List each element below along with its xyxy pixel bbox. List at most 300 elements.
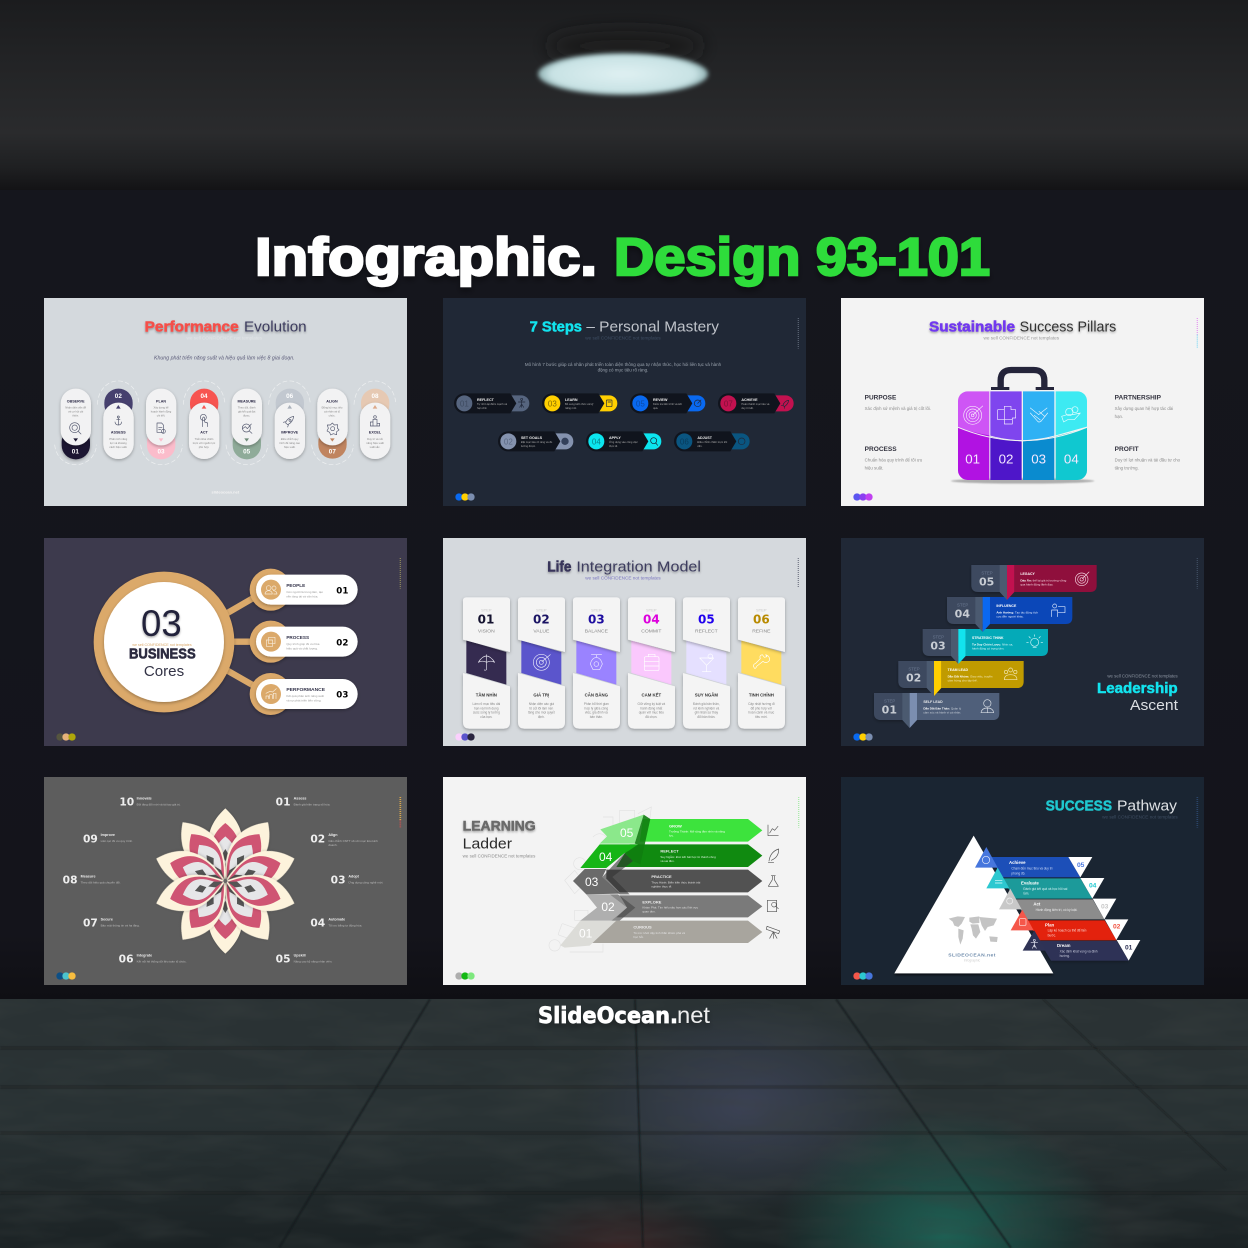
- step 08 excel: 08: [371, 393, 379, 400]
- panel: Sustainable Success Pillars: we sell CONFIDENCE not templates: [984, 336, 1060, 341]
- item 07 secure: [83, 917, 140, 930]
- step 02 set goals: SET GOALS: [521, 436, 543, 440]
- card 06 refine: hoàn cảnh và mục: [748, 711, 775, 715]
- panel: flower ten steps: [44, 777, 407, 985]
- text block: subtitle: Khung phát triển năng suất và hiệu quả làm việc 8 giai đoạn.: [154, 354, 295, 361]
- item 05 upskill: [276, 953, 332, 966]
- card 02 value: định.: [538, 715, 545, 719]
- arrow 03 practice: nghiệm thực tế.: [651, 884, 672, 888]
- arrow 03 practice: PRACTICE: [651, 874, 672, 879]
- heading: Leadership Ascent: Ascent: [1130, 698, 1178, 714]
- step 07 align: [317, 389, 348, 459]
- heading: 7 Steps: – Personal Mastery: [586, 319, 720, 335]
- arrow 05 grow: Trưởng Thành: Mở rộng tầm nhìn và năng: [669, 830, 725, 834]
- step 03 learn: LEARN: [565, 398, 578, 402]
- text block: process: hiệu suất.: [865, 466, 883, 471]
- step 06 improve: [275, 389, 305, 459]
- step 05 measure: Theo dõi, đánh: [238, 406, 256, 410]
- central circle: 03: [141, 603, 182, 644]
- step 02 assess: cách hiệu suất.: [109, 445, 128, 449]
- step 01 observe: Nhận diện vấn đề: [65, 406, 87, 410]
- step 06 adjust: [674, 431, 750, 451]
- arrow 05 grow: GROW: [669, 823, 682, 828]
- card 05 reflect: STEP: [701, 608, 712, 613]
- step 06 improve: Điều chỉnh quy: [281, 437, 299, 441]
- card 04 commit: STEP: [646, 608, 657, 613]
- band 03 act: [999, 889, 1116, 919]
- step 01 observe: thiện.: [72, 414, 79, 418]
- central circle: BUSINESS: [129, 647, 196, 663]
- item 09 improve: Liên tục tối ưu quy trình.: [101, 839, 133, 843]
- side brand: [796, 318, 800, 349]
- footer brand: SlideOcean.net: net: [677, 1002, 711, 1028]
- icon: world map: [949, 916, 998, 945]
- text block: profit: Duy trì lợi nhuận và tái đầu tư cho: [1115, 458, 1181, 463]
- step 02 assess: Phân tích năng: [109, 437, 128, 441]
- step 08 excel: nâng hiệu suất: [366, 441, 384, 445]
- step 03 plan: chi tiết.: [157, 414, 165, 418]
- card 03 balance: 03: [588, 613, 605, 627]
- item 01 assess: Assess: [294, 796, 306, 800]
- item 03 adopt: [331, 874, 383, 887]
- step 02 team lead: cảm hứng cho tập thể.: [948, 678, 978, 682]
- heading: we sell CONFIDENCE not templates: [463, 854, 535, 859]
- item 06 integrate: [119, 953, 187, 966]
- step 03 strategic think: [923, 629, 1048, 664]
- step 01 self lead: 01: [882, 704, 897, 717]
- step 01 reflect: hạn chế.: [477, 406, 487, 410]
- band 03 act: Hành động kiên trì, có kỷ luật.: [1036, 908, 1078, 912]
- icon: coin hand: [1062, 407, 1080, 422]
- chart: briefcase pillars: 02: [999, 452, 1013, 467]
- step 03 plan: 03: [157, 449, 165, 456]
- heading: 7 Steps: 7 Steps: [530, 319, 582, 335]
- text block: partnership: [1115, 395, 1173, 419]
- panel: Success Pathway: [841, 777, 1204, 985]
- chevron ladder: [560, 815, 650, 948]
- item 08 measure: [63, 874, 121, 887]
- arrow 05 grow: lực.: [669, 834, 674, 838]
- card 03 balance: hợp lý giữa công: [584, 706, 608, 710]
- item 01 assess: [276, 796, 331, 809]
- panel: Life Integration Model: [443, 538, 806, 746]
- title: Design 93-101: [614, 228, 990, 287]
- step 08 excel: Duy trì và nổi: [367, 437, 383, 441]
- heading: Leadership Ascent: we sell CONFIDENCE not templates: [1107, 674, 1178, 679]
- step 01 reflect: REFLECT: [477, 398, 495, 402]
- step 01 reflect: [454, 393, 529, 413]
- step 03 learn: 03: [548, 399, 557, 408]
- item 02 align: doanh.: [328, 843, 338, 847]
- step 03 strategic think: STRATEGIC THINK: [972, 636, 1004, 640]
- step 08 excel: xuất sắc.: [370, 444, 381, 449]
- chart: briefcase pillars: [951, 370, 1094, 484]
- panel: 7 Steps Personal Mastery: [443, 298, 806, 506]
- central circle: [94, 572, 234, 712]
- card 05 reflect: 05: [698, 613, 715, 627]
- item 03 performance: Kết quả phản ánh năng suất: [286, 694, 324, 698]
- item 03 adopt: Adopt: [348, 875, 360, 879]
- step 01 observe: OBSERVE: [67, 399, 85, 403]
- text block: process: [865, 447, 923, 471]
- arrow 01 curious: học hỏi.: [633, 935, 644, 939]
- step 07 achieve: 07: [724, 399, 733, 408]
- step 02 team lead: 02: [906, 672, 921, 685]
- side brand: [796, 558, 800, 588]
- card 01 vision: TẦM NHÌN: [476, 692, 497, 697]
- chevron ladder: 02: [601, 900, 615, 914]
- card 02 value: STEP: [536, 608, 547, 613]
- icon: puzzle: [998, 406, 1016, 424]
- text block: description: Mô hình 7 bước giúp cá nhân phát triển toàn diện thông qua tự nhận thức, học hỏi liên tục và hành: [525, 361, 722, 367]
- item 10 innovate: Innovate: [137, 796, 152, 800]
- chevron ladder: 04: [599, 850, 613, 864]
- item 03 adopt: 03: [331, 874, 346, 887]
- chevron ladder: 01: [579, 927, 593, 941]
- panel: Performance Evolution: we sell CONFIDENCE not templates: [187, 336, 263, 341]
- step 01 self lead: Dẫn Dắt Bản Thân: Quản lý: [923, 706, 961, 710]
- large white triangle: SLIDEOCEAN.net: [948, 952, 996, 958]
- item 02 align: Align: [328, 833, 337, 837]
- arrow 01 curious: CURIOUS: [633, 925, 652, 930]
- card 04 commit: Giữ vững kỷ luật và: [638, 702, 665, 706]
- chart: flower: [151, 808, 300, 954]
- item 04 automate: 04: [310, 917, 325, 930]
- large white triangle: [894, 836, 1053, 973]
- step 05 review: [630, 393, 705, 413]
- step 05 measure: được.: [243, 414, 250, 418]
- step 08 excel: [360, 389, 390, 459]
- heading: Integration Model: [576, 559, 701, 575]
- card 05 reflect: rút kinh nghiệm và: [693, 706, 719, 710]
- side brand: [398, 558, 402, 589]
- arrow 04 reflect: REFLECT: [660, 849, 679, 854]
- step 05 legacy: qua hành động lãnh đạo.: [1020, 582, 1054, 586]
- step 01 reflect: Tự nhìn lại điểm mạnh và: [477, 402, 508, 406]
- item 04 automate: [310, 917, 362, 930]
- item 01 assess: 01: [276, 796, 291, 809]
- step 04 act: Triển khai chiến: [195, 437, 214, 441]
- side brand: [1195, 318, 1199, 349]
- chart: briefcase pillars: 01: [965, 452, 980, 467]
- item 07 secure: Secure: [101, 918, 113, 922]
- card 02 value: tảng cho mọi quyết: [528, 711, 555, 715]
- step 04 influence: 04: [955, 608, 970, 621]
- heading: Pathway: [1117, 798, 1178, 814]
- panel: Learning Ladder: [443, 777, 806, 985]
- text block: profit: [1115, 447, 1181, 471]
- step 04 act: ACT: [200, 431, 209, 435]
- heading: [929, 319, 1116, 335]
- band 02 plan: [1011, 910, 1128, 940]
- item 07 secure: Bảo mật thông tin và hạ tầng.: [101, 924, 140, 928]
- panel: Performance Evolution: [44, 298, 407, 506]
- item 10 innovate: Đổi tăng đổi mới và tái tạo giá trị.: [137, 802, 181, 806]
- icon: target: [964, 406, 983, 424]
- item 01 people: 01: [336, 586, 348, 596]
- step 05 legacy: STEP: [981, 570, 993, 575]
- card 06 refine: để phù hợp với: [751, 706, 772, 710]
- card 06 refine: Cập nhật hướng đi: [748, 702, 775, 706]
- step 07 achieve: ACHIEVE: [741, 398, 758, 402]
- heading: Life: [547, 559, 571, 575]
- card 04 commit: CAM KẾT: [641, 692, 662, 697]
- text block: process: Chuẩn hóa quy trình để tối ưu: [865, 458, 923, 463]
- step 05 review: 05: [636, 399, 645, 408]
- step 04 apply: APPLY: [609, 436, 621, 440]
- heading: Performance Evolution: Performance: [145, 319, 239, 335]
- step 03 strategic think: STEP: [933, 634, 944, 639]
- brand dots: [455, 972, 475, 980]
- band 02 plan: Lập kế hoạch cụ thể để tiến: [1048, 929, 1087, 933]
- card 04 commit: [628, 597, 675, 729]
- step 07 achieve: duy trì kết.: [741, 406, 754, 410]
- item 02 align: 02: [310, 832, 325, 845]
- band 02 plan: 02: [1113, 924, 1121, 931]
- background: floor tiles: [0, 998, 1248, 1248]
- item 03 performance: và sự phát triển bền vững.: [286, 699, 322, 703]
- step 04 influence: [947, 597, 1072, 632]
- card 03 balance: bản thân.: [590, 715, 603, 719]
- side brand: [1195, 558, 1199, 589]
- text block: profit: PROFIT: [1115, 447, 1139, 453]
- band 04 evaluate: 04: [1089, 883, 1097, 890]
- step 04 influence: STEP: [957, 602, 968, 607]
- card 05 reflect: ghi nhận sự thay: [695, 711, 719, 715]
- arrow 01 curious: [590, 921, 780, 943]
- band 01 dream: [1023, 930, 1140, 961]
- icon: ceiling lamp: [538, 53, 708, 95]
- footer brand: slideocean.net: [211, 490, 240, 495]
- heading: SUCCESS: [1046, 798, 1112, 814]
- step 05 measure: MEASURE: [238, 399, 256, 403]
- step 02 assess: ASSESS: [111, 431, 126, 435]
- side brand: [398, 797, 403, 828]
- heading: Leadership Ascent: [1097, 674, 1178, 714]
- item 02 align: Căn chỉnh CNTT số với mục tiêu kinh: [328, 839, 378, 843]
- step 06 improve: trình để nâng cao: [279, 441, 301, 445]
- heading: 7 Steps: [530, 319, 720, 335]
- large white triangle: Infographic: [964, 958, 981, 962]
- card 02 value: VALUE: [533, 629, 550, 635]
- band 05 achieve: phong độ.: [1011, 871, 1025, 875]
- band 05 achieve: [975, 847, 1092, 877]
- chart: briefcase pillars: 04: [1064, 452, 1079, 467]
- card 04 commit: đã chọn.: [645, 715, 658, 719]
- card 06 refine: tiêu mới.: [755, 715, 768, 719]
- panel: 03 Business Cores: [44, 538, 407, 746]
- item 06 integrate: Kết nối hệ thống dữ liệu toàn tổ chức.: [137, 960, 187, 964]
- step 06 improve: hiệu suất.: [284, 445, 296, 449]
- band 02 plan: Plan: [1045, 922, 1054, 927]
- card 06 refine: 06: [753, 613, 770, 627]
- step 08 excel: EXCEL: [369, 431, 382, 435]
- arrow 03 practice: Thực Hành: Biến kiến thức thành trải: [651, 880, 701, 884]
- step 07 align: ALIGN: [326, 399, 338, 403]
- card 01 vision: hạn và hình dung: [474, 706, 499, 710]
- chart: briefcase pillars: 03: [1031, 452, 1046, 467]
- step 02 team lead: STEP: [908, 666, 920, 671]
- side brand: [797, 797, 801, 828]
- text block: purpose: PURPOSE: [865, 395, 896, 401]
- card 05 reflect: SUY NGẪM: [695, 692, 718, 697]
- step 01 self lead: cảm xúc và hành vi cá nhân.: [923, 710, 961, 714]
- band 04 evaluate: Đánh giá kết quả và học hỏi sai: [1023, 887, 1068, 891]
- band 03 act: 03: [1101, 903, 1109, 910]
- step 04 influence: cực đến người khác.: [996, 614, 1024, 618]
- step 04 act: [189, 389, 219, 459]
- brand dots: [455, 733, 475, 741]
- arrow 04 reflect: Suy Ngẫm: Đúc kết bài học từ thành công: [660, 854, 716, 859]
- side brand: [1195, 797, 1200, 828]
- heading: Performance Evolution: [145, 319, 307, 335]
- step 07 achieve: [718, 393, 794, 413]
- step 01 reflect: 01: [460, 399, 469, 408]
- card 03 balance: việc, gia đình và: [585, 711, 608, 715]
- step 04 apply: [586, 431, 661, 451]
- step 07 align: cá nhân và tổ: [324, 410, 340, 414]
- arrow 02 explore: [616, 895, 778, 917]
- heading: Success Pillars: [1020, 319, 1116, 335]
- step 02 assess: 02: [115, 393, 122, 400]
- background: ceiling wall: [0, 0, 1248, 190]
- item 03 adopt: Ứng dụng công nghệ mới.: [348, 880, 383, 885]
- step 06 improve: 06: [286, 393, 294, 400]
- item 01 people: [250, 569, 358, 611]
- item 08 measure: 08: [63, 874, 78, 887]
- connectors: [226, 595, 259, 689]
- step 05 legacy: LEGACY: [1020, 572, 1036, 576]
- panel: 7 Steps Personal Mastery: we sell CONFIDENCE not templates: [585, 336, 661, 341]
- card 06 refine: [738, 597, 785, 729]
- arrow 02 explore: EXPLORE: [642, 899, 662, 904]
- step 01 observe: và cơ hội cải: [68, 410, 84, 414]
- text block: partnership: PARTNERSHIP: [1115, 395, 1161, 401]
- step 04 act: lược với nguồn lực: [193, 441, 216, 445]
- step 02 team lead: Dẫn Dắt Nhóm: Giao việc, truyền: [948, 674, 992, 678]
- card 05 reflect: [683, 597, 730, 729]
- card 06 refine: STEP: [756, 608, 767, 613]
- card 04 commit: quán với mục tiêu: [639, 711, 664, 715]
- brand dots: [455, 493, 475, 501]
- panel: Leadership Ascent: [841, 538, 1204, 746]
- step 03 learn: Bổ sung kiến thức và kỹ: [565, 402, 594, 406]
- chevron ladder: 03: [585, 875, 599, 889]
- brand dots: [853, 733, 873, 741]
- background: dark middle band: [0, 190, 1248, 999]
- text block: partnership: hạn.: [1115, 414, 1123, 419]
- item 01 people: Con người là trung tâm, tạo: [286, 590, 323, 594]
- brand dots: [853, 972, 873, 980]
- step 05 legacy: 05: [979, 576, 994, 589]
- card 06 refine: TINH CHỈNH: [749, 692, 774, 697]
- card 01 vision: Làm rõ mục tiêu dài: [472, 702, 500, 706]
- step 01 self lead: SELF LEAD: [923, 700, 943, 704]
- title: Infographic.: [255, 228, 597, 287]
- card 02 value: 02: [533, 613, 550, 627]
- step 05 legacy: [971, 565, 1097, 600]
- step 07 align: chức.: [329, 414, 336, 418]
- step 04 influence: Ảnh Hưởng: Tạo tác động tích: [996, 610, 1038, 614]
- step 02 team lead: [898, 661, 1024, 696]
- card 01 vision: [463, 597, 510, 729]
- footer brand: SlideOcean.net: SlideOcean.: [538, 1004, 678, 1029]
- text block: profit: tăng trưởng.: [1115, 466, 1139, 471]
- step 06 adjust: ADJUST: [697, 436, 713, 440]
- item 07 secure: 07: [83, 917, 98, 930]
- text block: process: PROCESS: [865, 447, 897, 453]
- brand dots: [853, 493, 873, 501]
- step 01 observe: 01: [72, 449, 79, 456]
- chevron ladder: 05: [620, 826, 634, 840]
- item 04 automate: Automate: [328, 918, 345, 922]
- step 03 learn: năng mới.: [565, 406, 577, 410]
- card 04 commit: 04: [643, 613, 660, 627]
- brand dots: [56, 733, 76, 741]
- item 05 upskill: 05: [276, 953, 291, 966]
- card 05 reflect: đổi bản thân.: [697, 715, 716, 719]
- step 05 review: Kiểm tra tiến trình và kết: [653, 402, 682, 406]
- heading: Leadership Ascent: Leadership: [1097, 681, 1178, 697]
- step 04 act: 04: [200, 393, 208, 400]
- step 01 observe: [61, 389, 91, 459]
- card 03 balance: STEP: [591, 608, 602, 613]
- heading: we sell CONFIDENCE not templates: [1102, 815, 1178, 820]
- step 03 strategic think: hành động có trọng tâm.: [972, 646, 1005, 650]
- step 04 act: phù hợp.: [199, 445, 210, 449]
- item 08 measure: Measure: [81, 875, 96, 879]
- step 06 adjust: 06: [680, 437, 689, 446]
- panel: Life Integration Model: we sell CONFIDENCE not templates: [585, 576, 661, 581]
- item 05 upskill: Nâng cao kỹ năng nhân viên.: [294, 960, 332, 964]
- step 01 self lead: STEP: [884, 698, 895, 703]
- item 02 process: Quy trình giúp tối ưu hóa: [286, 642, 320, 646]
- card 03 balance: CÂN BẰNG: [585, 692, 609, 697]
- item 02 process: PROCESS: [286, 635, 309, 640]
- band 05 achieve: Achieve: [1009, 860, 1026, 865]
- card 01 vision: STEP: [481, 608, 492, 613]
- item 09 improve: [83, 832, 133, 845]
- step 03 plan: Xây dựng kế: [153, 406, 169, 410]
- card 03 balance: BALANCE: [585, 629, 609, 635]
- text block: partnership: Xây dựng quan hệ hợp tác dài: [1115, 406, 1173, 411]
- card 01 vision: 01: [478, 613, 494, 627]
- step 07 align: Đồng bộ mục tiêu: [322, 406, 343, 410]
- step 03 plan: hoạch hành động: [151, 410, 172, 414]
- item 02 process: hiệu quả và chất lượng.: [286, 647, 318, 651]
- band 02 plan: bước.: [1048, 933, 1056, 937]
- item 02 align: [310, 832, 378, 847]
- step 03 learn: [542, 393, 617, 413]
- step 02 set goals: Đặt mục tiêu rõ ràng và đo: [521, 440, 553, 444]
- step 06 adjust: Điều chỉnh chiến lược khi: [697, 440, 728, 444]
- card 02 value: Nhận diện các giá: [529, 702, 554, 706]
- heading: Sustainable: [929, 319, 1015, 335]
- panel: Sustainable Success Pillars: [841, 298, 1204, 506]
- card 01 vision: VISION: [478, 629, 495, 635]
- title: [255, 228, 990, 287]
- item 03 performance: PERFORMANCE: [286, 687, 325, 692]
- step 03 plan: PLAN: [156, 399, 166, 403]
- item 01 people: nền tảng tài và văn hóa.: [286, 595, 318, 599]
- step 07 align: 07: [329, 449, 336, 456]
- step 02 assess: [103, 389, 134, 459]
- item 03 performance: 03: [336, 691, 348, 701]
- arrow 05 grow: [640, 819, 778, 842]
- item 09 improve: 09: [83, 832, 98, 845]
- card 05 reflect: Đánh giá bản thân,: [693, 702, 720, 706]
- item 02 process: 02: [336, 638, 348, 648]
